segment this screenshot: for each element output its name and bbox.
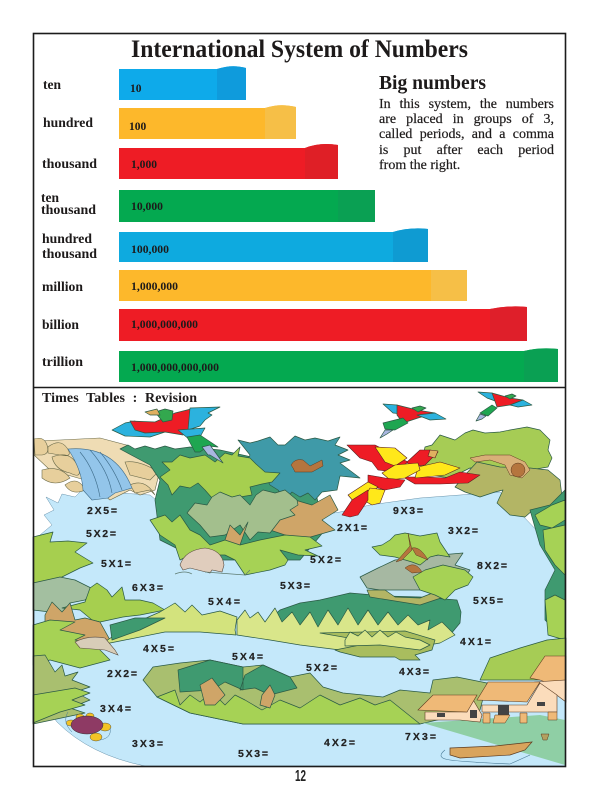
exercises: multiplication labels: 4 X 5 = [143,643,174,655]
bar: hundred: 100 [129,121,146,133]
bar: ten: 10 [130,83,142,95]
title: International System of Numbers [131,36,468,63]
bar: thousand: thousand [42,156,97,171]
exercises: multiplication labels: 5 X 3 = [238,748,268,760]
foliage: left bank [33,620,110,668]
bar: hundred thousand: 100,000 [131,244,169,256]
exercises: multiplication labels: 7 X 3 = [405,731,436,743]
exercises: multiplication labels: 3 X 4 = [100,703,131,715]
foliage: right edge [530,490,565,640]
bar chart: number names [41,66,558,382]
waterfall and rocks [34,438,160,500]
page number: 12 [295,768,306,785]
bar: ten thousand: 10,000 [131,201,163,213]
exercises: multiplication labels: 2 X 1 = [337,522,367,534]
text block: big numbers description: In this system, the numbers [379,97,554,112]
tree: teal [238,436,360,500]
text block: big numbers description: from the right. [379,158,460,173]
scene: jungle lagoon [33,392,566,766]
text block: big numbers description: called periods, and a comma [379,127,554,142]
bar: ten thousand: ten [41,190,59,205]
tree: lower leaves [150,515,322,575]
exercises: multiplication labels: 5 X 2 = [86,528,116,540]
land: long island [143,660,487,724]
lizard [75,637,118,655]
bar: trillion: 1,000,000,000,000 [131,362,219,374]
bar: billion: billion [42,317,79,332]
tree: tan trunk foliage [270,490,338,540]
text block: big numbers description: is put after each period [379,143,554,158]
boat [441,734,549,764]
tree: right canopy [420,427,562,517]
exercises: multiplication labels: 3 X 2 = [448,525,478,537]
text block: big numbers description: are placed in groups of 3, [379,112,554,127]
small parrot middle [380,404,446,438]
foliage: lower left bank [33,655,90,724]
bar: hundred thousand: thousand [42,246,97,261]
exercises: multiplication labels: 3 X 3 = [132,738,163,750]
ground: shore [423,715,565,765]
land: far shore with crocodile [237,593,461,660]
heading: big numbers: Big numbers [379,72,486,94]
bar: million: 1,000,000 [131,281,178,293]
exercises: multiplication labels: 6 X 3 = [132,582,163,594]
exercises: multiplication labels: 5 X 2 = [310,554,341,566]
exercises: multiplication labels [86,505,507,760]
bar: ten [43,66,246,100]
exercises: multiplication labels: 4 X 3 = [399,666,429,678]
bar: hundred thousand [42,228,428,262]
bar: million: million [42,279,83,294]
tree: light green leaves [160,447,280,503]
exercises: multiplication labels: 4 X 1 = [460,636,491,648]
exercises: multiplication labels: 5 X 3 = [280,580,310,592]
large parrot [342,445,480,517]
tree: sage foliage [187,490,298,540]
bar: thousand: 1,000 [131,159,157,171]
bar: hundred thousand: hundred [42,231,92,246]
bar: ten thousand: thousand [41,202,96,217]
exercises: multiplication labels: 5 X 1 = [101,558,131,570]
exercises: multiplication labels: 5 X 5 = [473,595,503,607]
turtle [66,712,111,741]
heading: times tables revision: Times Tables : Revision [42,391,197,406]
exercises: multiplication labels: 2 X 5 = [87,505,117,517]
foliage: top left bank [33,532,93,585]
bar: thousand [42,144,338,179]
monkey on teal tree [291,460,323,472]
bar: hundred [43,105,296,139]
exercises: multiplication labels: 5 X 2 = [306,662,337,674]
bar: billion: 1,000,000,000 [131,319,198,331]
bar: billion [42,306,527,341]
small parrot left [112,407,223,463]
exercises: multiplication labels: 5 X 4 = [208,596,240,608]
text block: big numbers description [379,97,554,173]
bar: ten thousand [41,190,375,222]
bar: trillion: trillion [42,354,84,369]
hippo [180,548,224,573]
hippo ripple [175,570,250,575]
exercises: multiplication labels: 5 X 4 = [232,651,263,663]
exercises: multiplication labels: 2 X 2 = [107,668,137,680]
small parrot right [476,392,532,421]
bar: million [42,270,467,301]
reed grass band [100,603,237,645]
jungle: back green [120,445,325,560]
bar: ten: ten [43,77,61,92]
palm [62,583,165,622]
exercises: multiplication labels: 9 X 3 = [393,505,423,517]
exercises: multiplication labels: 4 X 2 = [324,737,355,749]
exercises: multiplication labels: 8 X 2 = [477,560,507,572]
water [34,490,565,766]
tree: grey foliage with hanging monkey [360,533,473,605]
village huts [418,638,566,723]
bar: hundred: hundred [43,115,93,130]
bar: trillion [42,348,558,382]
